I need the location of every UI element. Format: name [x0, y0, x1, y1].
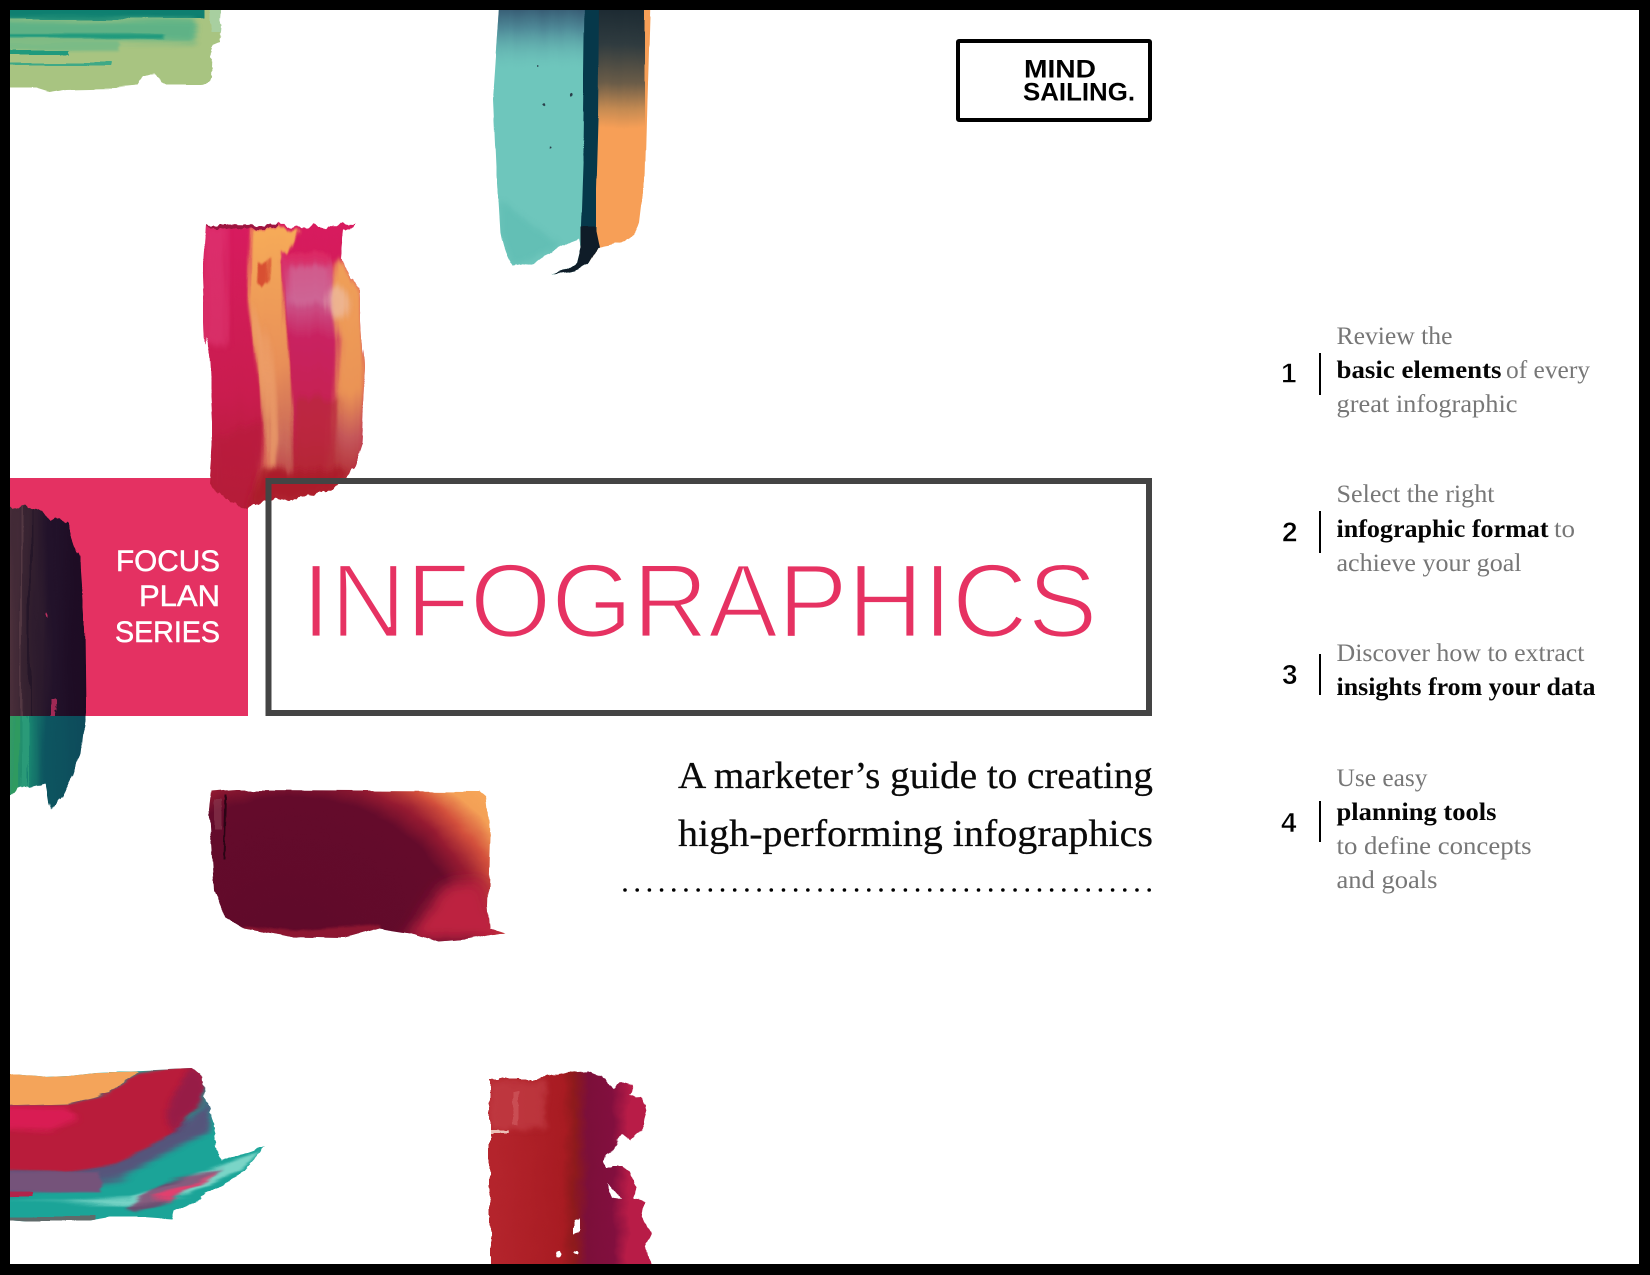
- paint stroke: teal and orange top: [490, 0, 655, 280]
- series label: SERIES: [115, 616, 220, 649]
- paint holes: [555, 1182, 622, 1258]
- text 1: basic elements: [1336, 357, 1502, 384]
- paint stroke: dark plum and teal left: [10, 504, 86, 810]
- text 2: to: [1554, 516, 1575, 543]
- text 3: insights from your data: [1336, 674, 1596, 701]
- divider 2: [1319, 511, 1321, 553]
- subtitle: A marketer’s guide to creating: [678, 755, 1153, 797]
- paint stroke: wine and orange: [205, 785, 510, 945]
- dotted rule: [625, 888, 1152, 892]
- list item 1: [1281, 323, 1591, 418]
- text 4: and goals: [1336, 867, 1438, 894]
- divider 1: [1319, 353, 1321, 395]
- title frame: [268, 481, 1149, 713]
- text 1: Review the: [1336, 323, 1452, 350]
- logo: Mind Sailing: SAILING.: [1023, 78, 1135, 106]
- text 2: [1336, 481, 1575, 577]
- text 2: Select the right: [1336, 481, 1495, 508]
- series label: PLAN: [139, 580, 220, 613]
- divider 4: [1319, 801, 1321, 842]
- text 1: of every: [1506, 357, 1591, 384]
- list item 2: [1282, 481, 1575, 577]
- subtitle: [678, 755, 1153, 855]
- text 4: to define concepts: [1336, 833, 1532, 860]
- text 1: great infographic: [1336, 391, 1518, 418]
- number 2: 2: [1282, 516, 1298, 548]
- text 2: achieve your goal: [1336, 550, 1522, 577]
- list item 4: [1281, 765, 1532, 894]
- paint stroke: green top left: [10, 10, 222, 92]
- text 4: [1336, 765, 1532, 894]
- text 3: [1336, 640, 1596, 701]
- text 3: Discover how to extract: [1336, 640, 1585, 667]
- text 4: planning tools: [1336, 799, 1497, 826]
- logo: Mind Sailing: [958, 41, 1150, 120]
- logo: Mind Sailing: MIND: [1024, 56, 1096, 84]
- text 2: infographic format: [1336, 516, 1549, 543]
- number 1: 1: [1281, 358, 1297, 388]
- focus plan series panel: [10, 478, 248, 716]
- divider 3: [1319, 654, 1321, 695]
- series label: FOCUS: [116, 545, 220, 578]
- text 1: [1336, 323, 1591, 418]
- paint stroke: red and plum bottom: [488, 1068, 654, 1275]
- paint stroke: orange crimson and teal bottom left: [10, 1068, 265, 1222]
- subtitle: high-performing infographics: [678, 813, 1153, 855]
- number 4: 4: [1281, 807, 1297, 838]
- title: INFOGRAPHICS: [302, 543, 1098, 660]
- list item 3: [1282, 640, 1596, 701]
- text 4: Use easy: [1336, 765, 1428, 792]
- number 3: 3: [1282, 659, 1298, 690]
- series label: [115, 545, 220, 649]
- paint stroke: crimson and orange: [200, 220, 370, 512]
